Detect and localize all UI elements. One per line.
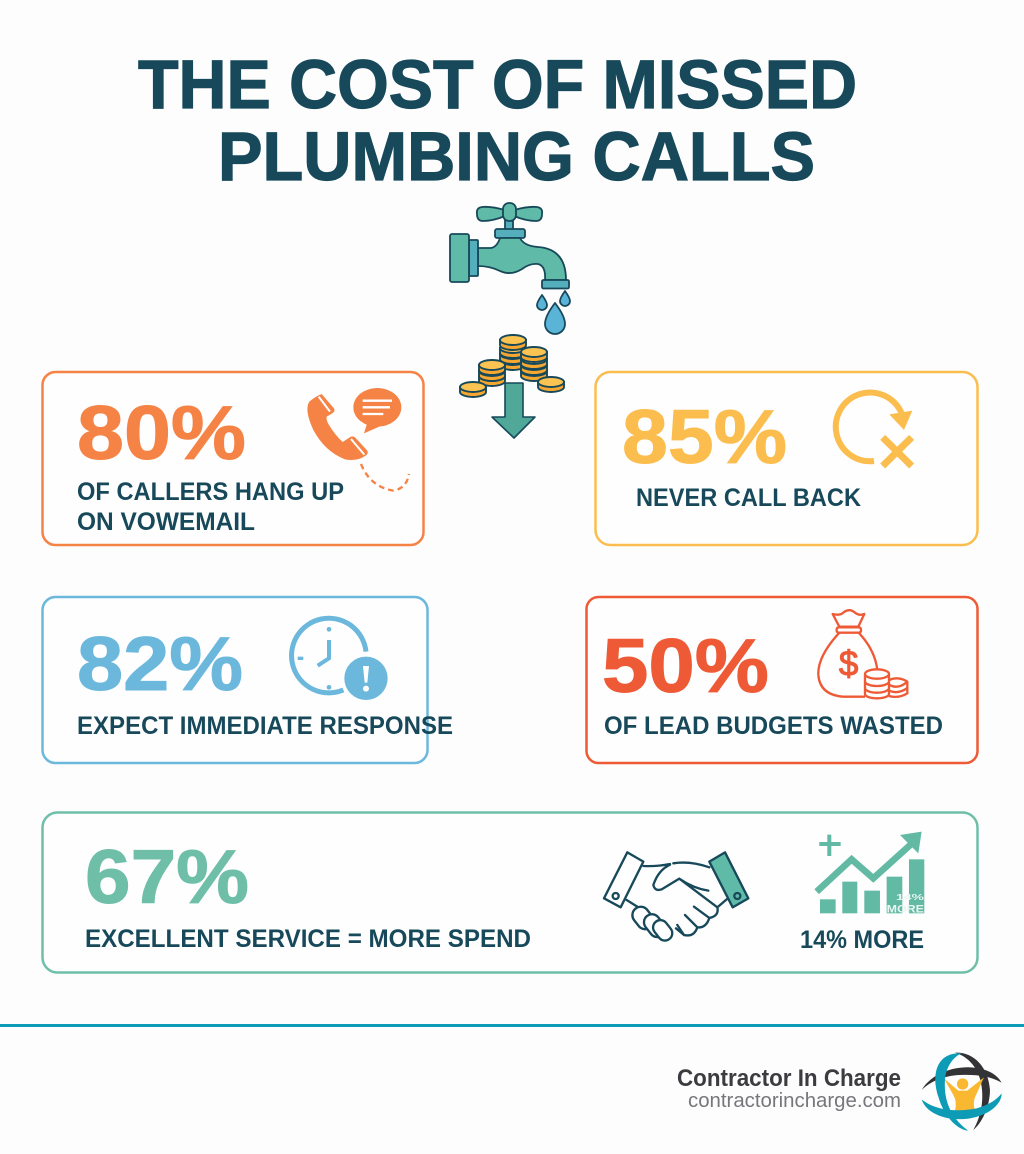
label: callers hang up: ON VOWEMAIL (77, 508, 255, 536)
title: THE COST OF MISSED (138, 46, 857, 123)
panel: 50% lead budgets wasted (586, 597, 978, 763)
footer brand text: contractorincharge.com (688, 1090, 901, 1112)
logo (922, 1053, 1002, 1131)
icon: callback arrow with cross (836, 393, 912, 466)
label: immediate response: EXPECT IMMEDIATE RESPONSE (77, 712, 453, 740)
label: callers hang up (77, 478, 344, 536)
icon: handshake (604, 852, 748, 944)
label: 14% more: 14% MORE (800, 926, 924, 954)
icon: growth chart: 14% (896, 892, 924, 902)
footer divider (0, 1024, 1024, 1027)
label: lead budgets wasted: OF LEAD BUDGETS WASTED (604, 712, 943, 740)
panel: 82% immediate response (42, 597, 453, 763)
label: never call back: NEVER CALL BACK (636, 484, 861, 512)
label: excellent service: EXCELLENT SERVICE = MORE SPEND (85, 925, 531, 953)
label: callers hang up: OF CALLERS HANG UP (77, 478, 344, 506)
icon: dripping faucet (450, 203, 570, 334)
panel: 67% excellent service (42, 812, 978, 972)
icon: growth chart: MORE (887, 904, 924, 916)
panel: 50% lead budgets wasted: 50% (602, 624, 769, 709)
icon: down arrow (492, 383, 535, 438)
footer brand text (677, 1065, 901, 1112)
panel: 82% immediate response: 82% (77, 622, 243, 707)
icon: growth chart (817, 832, 924, 916)
panel: 67% excellent service: 67% (85, 835, 249, 920)
icon: coin stacks (460, 335, 564, 397)
icon: money bag with coins: $ (839, 644, 858, 683)
title: PLUMBING CALLS (218, 118, 815, 195)
icon: phone with speech bubble (307, 388, 409, 491)
panel: 85% never call back: 85% (622, 395, 787, 480)
panel: 80% hang up: 80% (77, 391, 246, 476)
footer brand text: Contractor In Charge (677, 1065, 901, 1092)
panel: 85% never call back (596, 372, 978, 545)
icon: money bag with coins (818, 610, 907, 698)
title (138, 46, 857, 195)
icon: clock with alert (292, 618, 388, 700)
panel: 80% hang up (42, 372, 424, 545)
